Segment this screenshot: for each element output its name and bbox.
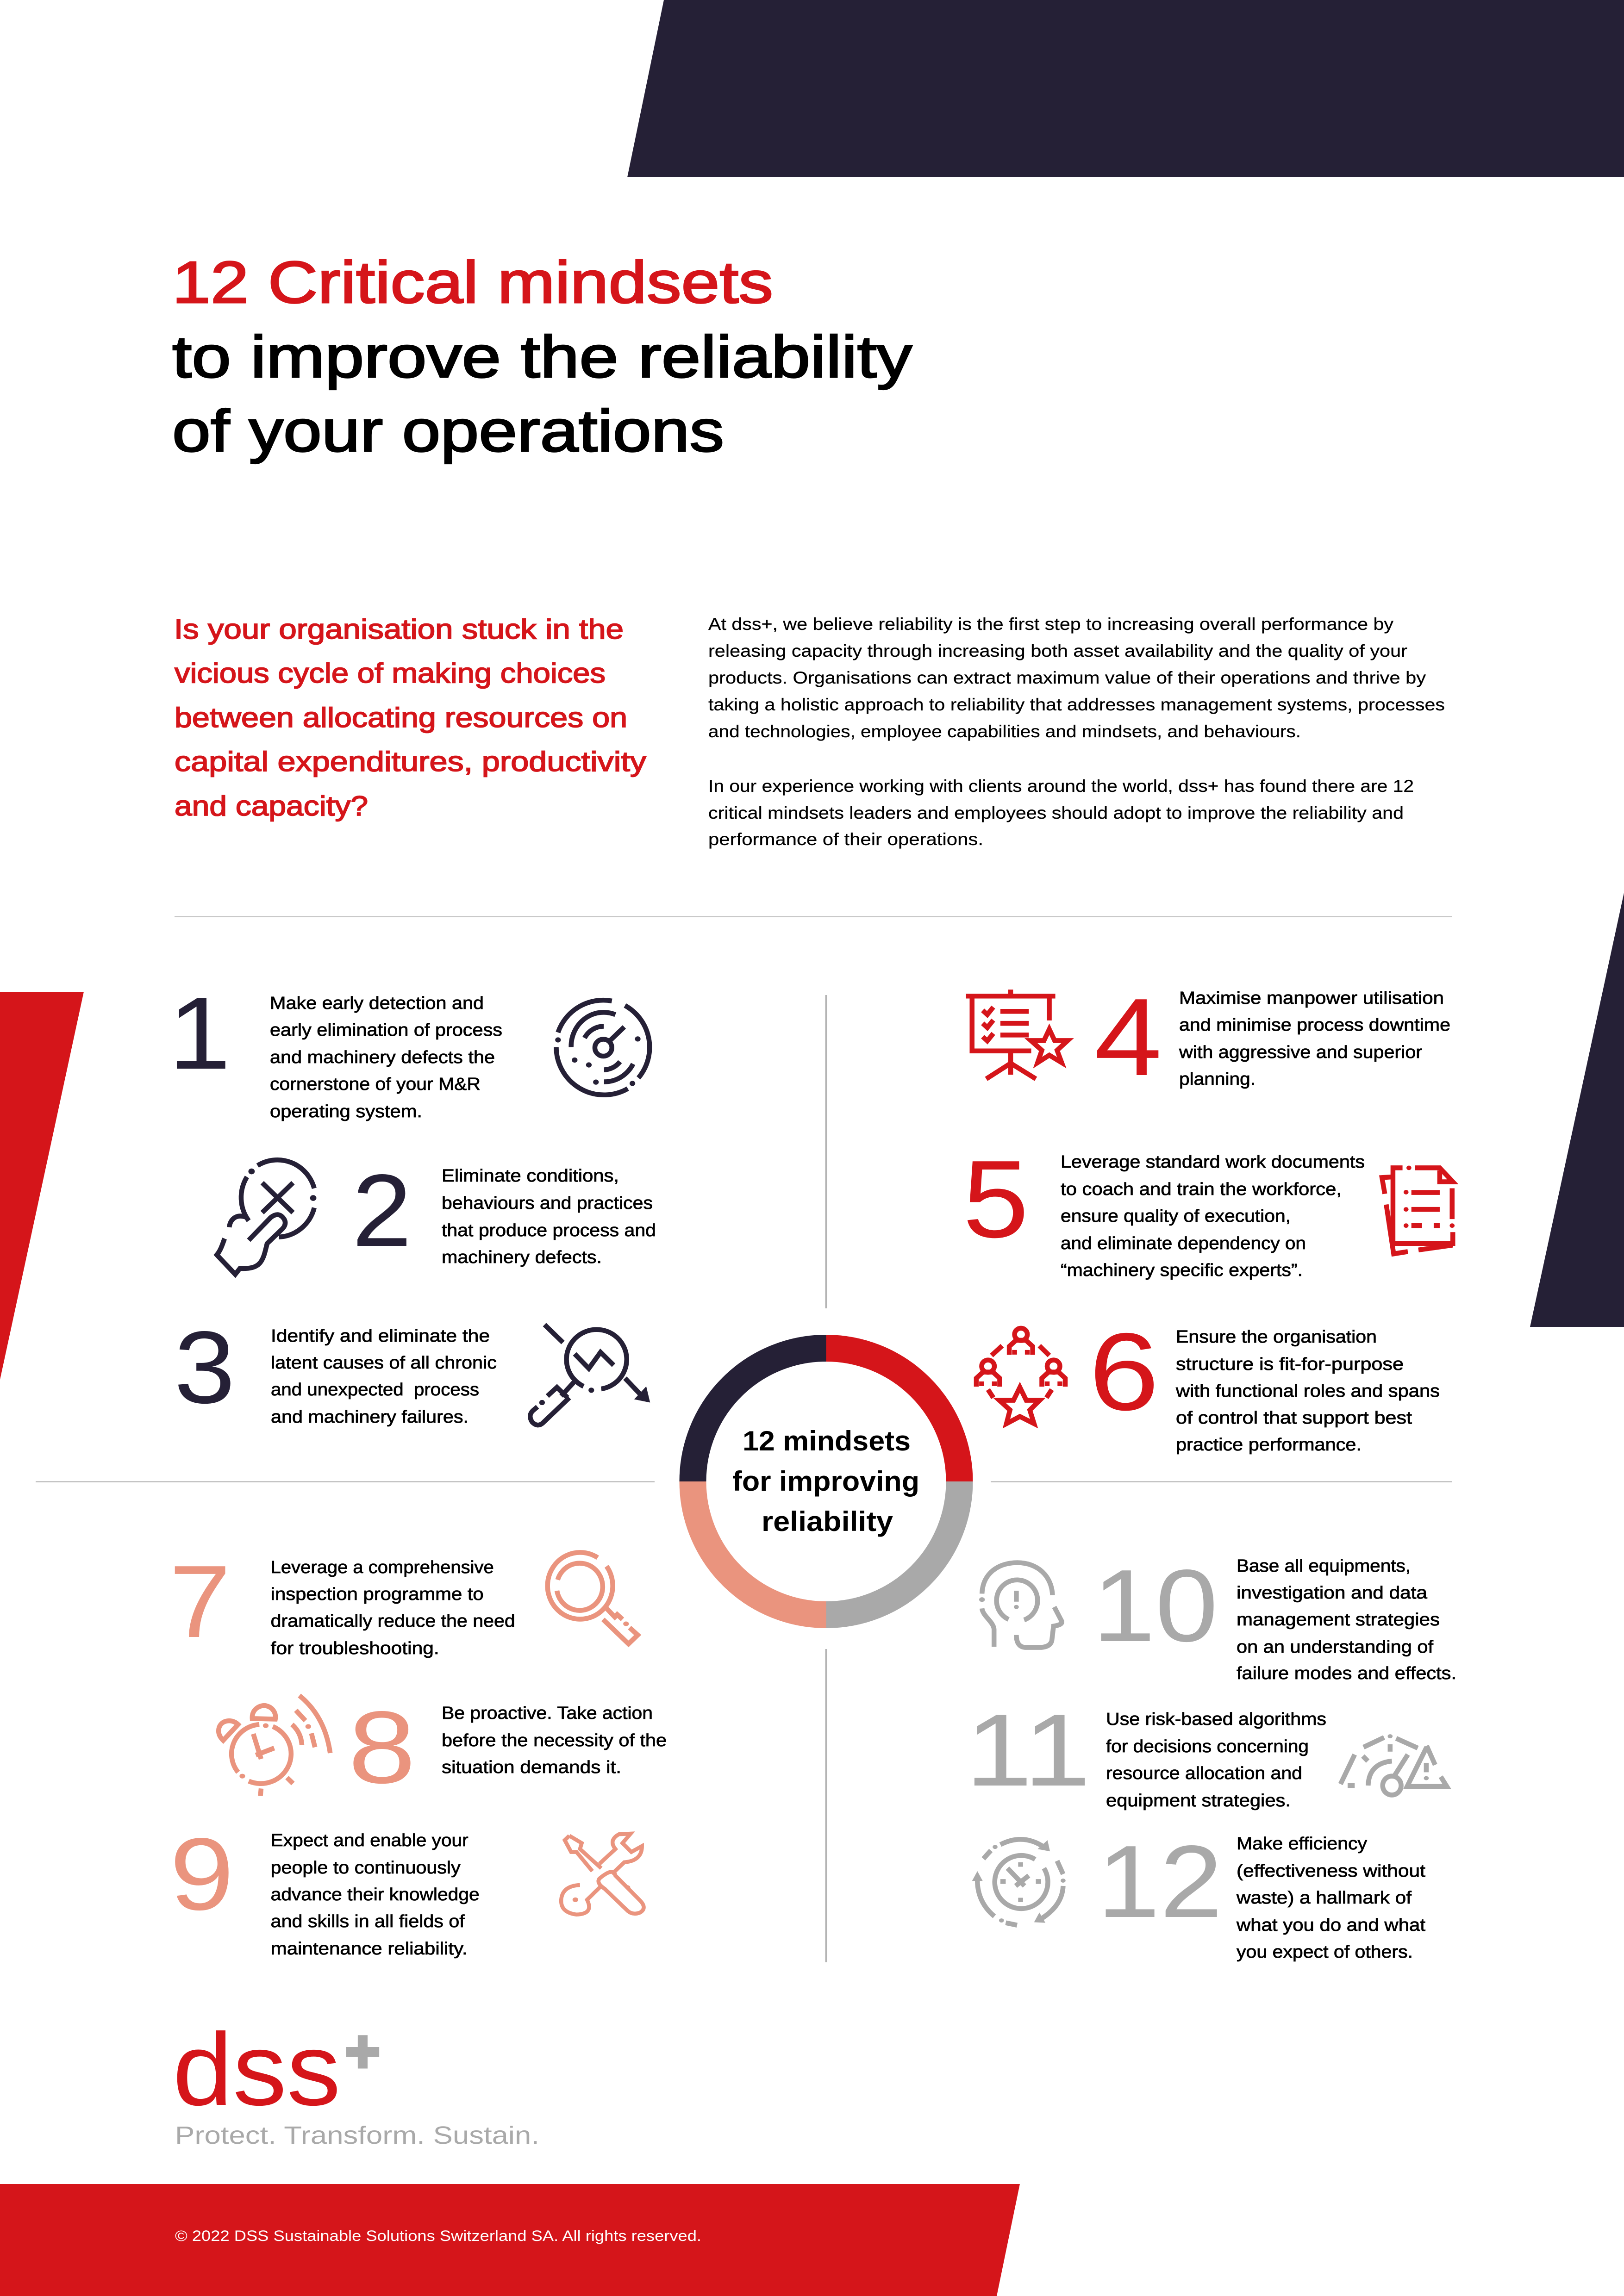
logo: dss+: + — [344, 2018, 379, 2084]
intro question: and capacity? — [175, 790, 368, 821]
text 12: Make efficiency — [1237, 1834, 1367, 1854]
text 3: latent causes of all chronic — [271, 1353, 497, 1373]
text 3: Identify and eliminate the — [271, 1326, 490, 1346]
mindset 6 — [976, 1311, 1440, 1455]
left red wedge — [0, 992, 84, 1380]
text 4 — [1179, 989, 1450, 1089]
text 4: and minimise process downtime — [1179, 1015, 1450, 1035]
text 2: machinery defects. — [442, 1248, 602, 1267]
number 10: 10 — [1093, 1549, 1218, 1663]
number 12: 12 — [1097, 1824, 1223, 1939]
text 6: with functional roles and spans — [1175, 1381, 1440, 1401]
copyright: © 2022 DSS Sustainable Solutions Switzerland SA. All rights reserved. — [175, 2228, 701, 2244]
intro paragraph: At dss+, we believe reliability is the first step to increasing overall performance by — [708, 615, 1394, 634]
number 6: 6 — [1089, 1311, 1159, 1433]
text 7: dramatically reduce the need — [271, 1612, 515, 1631]
text 4: planning. — [1179, 1070, 1255, 1089]
icon: hand and cross — [217, 1160, 316, 1274]
text 12: (effectiveness without — [1237, 1861, 1425, 1881]
text 12: what you do and what — [1236, 1916, 1425, 1935]
intro question: Is your organisation stuck in the — [174, 614, 624, 645]
intro paragraph: critical mindsets leaders and employees should adopt to improve the reliability and — [708, 803, 1404, 822]
text 10: Base all equipments, — [1237, 1556, 1411, 1576]
text 8: Be proactive. Take action — [442, 1704, 653, 1723]
logo: dss+: dss — [173, 2012, 341, 2127]
text 1: Make early detection and — [270, 994, 484, 1013]
icon: team circle with star — [976, 1328, 1065, 1424]
mindset 8 — [219, 1690, 667, 1805]
text 10: investigation and data — [1237, 1583, 1428, 1603]
text 1 — [270, 994, 502, 1121]
text 5: to coach and train the workforce, — [1061, 1180, 1342, 1199]
text 6: of control that support best — [1176, 1408, 1412, 1428]
text 9: maintenance reliability. — [271, 1939, 468, 1959]
text 10: failure modes and effects. — [1237, 1664, 1456, 1683]
icon: head with exclamation — [979, 1563, 1062, 1648]
footer band — [0, 2184, 1020, 2296]
intro paragraph: taking a holistic approach to reliability that addresses management systems, processes — [708, 695, 1445, 714]
text 8: situation demands it. — [442, 1758, 621, 1777]
text 5: “machinery specific experts”. — [1061, 1261, 1303, 1280]
icon: magnifier with trend — [530, 1325, 650, 1425]
text 9: people to continuously — [271, 1858, 461, 1878]
icon: presentation board with star — [966, 989, 1068, 1079]
text 6 — [1175, 1327, 1440, 1455]
text 5: ensure quality of execution, — [1061, 1207, 1291, 1226]
text 11: equipment strategies. — [1106, 1791, 1291, 1811]
icon: alarm clock — [219, 1696, 330, 1796]
text 7: for troubleshooting. — [271, 1639, 439, 1658]
number 11: 11 — [965, 1693, 1091, 1808]
text 3: and unexpected process — [271, 1380, 479, 1400]
mindset 4 — [966, 976, 1450, 1099]
icon: radar — [555, 1000, 650, 1095]
top dark banner shape — [627, 0, 1624, 177]
text 11: for decisions concerning — [1106, 1737, 1309, 1756]
mindset 3 — [174, 1310, 650, 1427]
intro paragraph: and technologies, employee capabilities and mindsets, and behaviours. — [708, 722, 1301, 741]
number 3: 3 — [174, 1310, 235, 1425]
mindset 12 — [972, 1824, 1425, 1962]
intro paragraph: performance of their operations. — [708, 830, 983, 849]
text 10: on an understanding of — [1237, 1637, 1433, 1657]
mindset 5 — [963, 1138, 1455, 1280]
mindset 7 — [169, 1544, 638, 1659]
mindset 10 — [979, 1549, 1456, 1683]
text 11: Use risk-based algorithms — [1106, 1710, 1326, 1729]
intro question: capital expenditures, productivity — [175, 746, 646, 777]
mindset 11 — [965, 1693, 1447, 1811]
central ring with caption: for improving — [732, 1466, 919, 1497]
text 5: Leverage standard work documents — [1061, 1152, 1365, 1172]
number 8: 8 — [348, 1690, 416, 1805]
text 1: and machinery defects the — [270, 1048, 495, 1067]
number 5: 5 — [963, 1138, 1029, 1261]
text 3 — [271, 1326, 497, 1427]
text 12 — [1236, 1834, 1425, 1962]
text 4: Maximise manpower utilisation — [1179, 989, 1444, 1008]
mindset 9 — [169, 1817, 644, 1959]
number 9: 9 — [169, 1817, 234, 1932]
text 11: resource allocation and — [1106, 1764, 1302, 1783]
text 7: inspection programme to — [271, 1585, 484, 1604]
text 11 — [1106, 1710, 1326, 1811]
text 9: Expect and enable your — [271, 1831, 468, 1850]
number 2: 2 — [352, 1153, 412, 1268]
text 1: early elimination of process — [270, 1020, 502, 1040]
text 12: you expect of others. — [1237, 1942, 1413, 1962]
text 2: Eliminate conditions, — [442, 1166, 619, 1186]
text 9: and skills in all fields of — [271, 1912, 465, 1931]
text 10 — [1237, 1556, 1456, 1683]
text 9: advance their knowledge — [271, 1885, 480, 1904]
icon: gauge with warning — [1341, 1734, 1447, 1795]
text 5 — [1061, 1152, 1365, 1280]
intro paragraph — [708, 615, 1445, 849]
text 6: Ensure the organisation — [1176, 1327, 1377, 1347]
number 4: 4 — [1094, 976, 1162, 1099]
text 2: that produce process and — [442, 1221, 656, 1240]
title: 12 Critical mindsets — [172, 249, 773, 316]
text 6: practice performance. — [1176, 1435, 1362, 1455]
mindset 2 — [217, 1153, 656, 1274]
text 9 — [271, 1831, 480, 1959]
tagline: Protect. Transform. Sustain. — [175, 2122, 539, 2149]
intro question: vicious cycle of making choices — [175, 658, 606, 689]
right dark wedge — [1530, 893, 1624, 1327]
number 1: 1 — [169, 976, 231, 1091]
text 3: and machinery failures. — [271, 1407, 468, 1427]
text 7 — [271, 1558, 515, 1658]
intro question: between allocating resources on — [175, 702, 627, 733]
central ring with caption: 12 mindsets — [743, 1425, 911, 1456]
icon: crossed tools — [561, 1834, 644, 1915]
text 1: cornerstone of your M&R — [270, 1075, 481, 1094]
text 8 — [442, 1704, 667, 1777]
intro paragraph: products. Organisations can extract maximum value of their operations and thrive by — [708, 668, 1426, 687]
mindset 1 — [169, 976, 650, 1121]
text 1: operating system. — [270, 1102, 422, 1121]
text 2: behaviours and practices — [442, 1194, 653, 1213]
icon: clock with cycle arrows — [972, 1839, 1066, 1925]
title: of your operations — [172, 398, 724, 464]
text 8: before the necessity of the — [442, 1731, 667, 1750]
text 6: structure is fit-for-purpose — [1176, 1355, 1404, 1374]
central ring with caption — [693, 1348, 959, 1615]
text 5: and eliminate dependency on — [1061, 1234, 1306, 1253]
title: to improve the reliability — [172, 324, 912, 390]
text 10: management strategies — [1237, 1610, 1440, 1630]
text 12: waste) a hallmark of — [1236, 1888, 1412, 1908]
central ring with caption: reliability — [762, 1506, 893, 1537]
intro paragraph: releasing capacity through increasing both asset availability and the quality of your — [708, 641, 1407, 660]
intro question — [174, 614, 646, 821]
number 7: 7 — [169, 1544, 231, 1659]
icon: documents — [1382, 1165, 1455, 1254]
icon: magnifying glass — [548, 1552, 638, 1644]
intro paragraph: In our experience working with clients around the world, dss+ has found there are 12 — [708, 777, 1414, 796]
text 4: with aggressive and superior — [1179, 1043, 1422, 1062]
text 7: Leverage a comprehensive — [271, 1558, 494, 1577]
text 2 — [442, 1166, 656, 1267]
title — [172, 249, 912, 464]
